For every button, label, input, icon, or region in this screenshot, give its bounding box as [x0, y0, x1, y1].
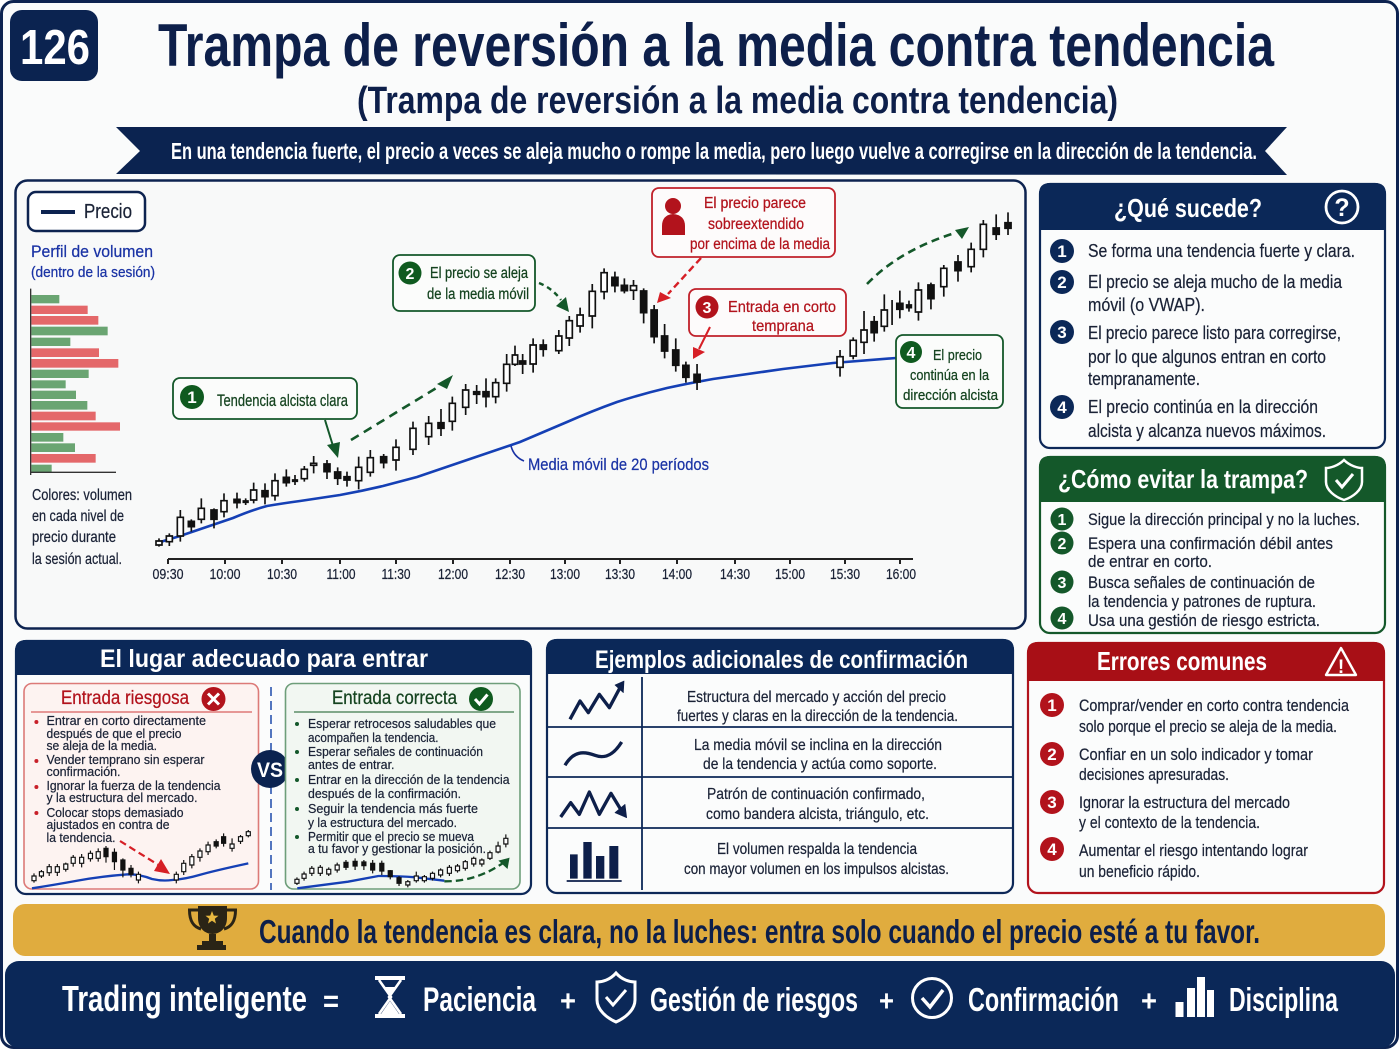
- row 2: La media móvil se inclina en la dirección: [694, 737, 942, 754]
- item 2: decisiones apresuradas.: [1079, 765, 1229, 784]
- subtitle: (Trampa de reversión a la media contra tendencia): [357, 80, 1118, 122]
- icon: shield check: [1326, 460, 1362, 500]
- item 4: [1040, 837, 1308, 881]
- badge: vs: [251, 750, 289, 788]
- row 4: El volumen respalda la tendencia: [717, 841, 917, 858]
- heading: volume profile: (dentro de la sesión): [31, 265, 155, 281]
- callout 3: early short: [689, 289, 846, 336]
- icon: question mark: ?: [1334, 194, 1350, 222]
- time axis: 16:00: [886, 567, 916, 583]
- item 2: 2: [1058, 536, 1067, 553]
- item 4: Aumentar el riesgo intentando lograr: [1079, 841, 1308, 860]
- list: correct entry: a tu favor y gestionar la posición.: [308, 841, 486, 856]
- arrow: risky entry: [120, 841, 170, 874]
- list: risky entry: Ignorar la fuerza de la tendencia: [46, 778, 221, 793]
- list: correct entry: Permitir que el precio se mueva: [308, 829, 475, 844]
- callout: overextended: El precio parece: [704, 195, 806, 212]
- time axis: 15:00: [775, 567, 805, 583]
- footer: smart trading formula: Disciplina: [1229, 981, 1338, 1018]
- list: correct entry: Esperar señales de continuación: [308, 744, 483, 759]
- heading: errores comunes: Errores comunes: [1097, 646, 1267, 676]
- icon: shield: [597, 973, 635, 1022]
- panel: additional confirmation examples: [546, 639, 1014, 893]
- footer: smart trading formula: Trading inteligente: [62, 978, 307, 1019]
- callout 4: continuation: continúa en la: [910, 367, 990, 384]
- item 4: 4: [1047, 840, 1057, 859]
- heading: lugar adecuado: El lugar adecuado para entrar: [100, 645, 428, 673]
- item 4: [1050, 606, 1320, 630]
- arrow: overextended to peak: [657, 258, 701, 303]
- sub-panel: risky entry: [24, 684, 258, 889]
- item 4: alcista y alcanza nuevos máximos.: [1088, 420, 1326, 441]
- list: correct entry: antes de entrar.: [308, 757, 394, 772]
- icon: bars: [1176, 977, 1214, 1017]
- arrow: callout 3 to entry: [693, 327, 710, 359]
- item 2: El precio se aleja mucho de la media: [1088, 271, 1343, 292]
- item 2: de entrar en corto.: [1088, 552, 1212, 571]
- list: risky entry: la tendencia.: [46, 830, 116, 845]
- callout 2: price moves away: de la media móvil: [427, 286, 529, 303]
- footer: smart trading formula: =: [323, 985, 339, 1018]
- footer: smart trading formula: Confirmación: [968, 981, 1119, 1018]
- text: color note: la sesión actual.: [32, 551, 122, 568]
- item 3: El precio parece listo para corregirse,: [1088, 322, 1341, 343]
- time axis: 15:30: [830, 567, 860, 583]
- item 1: 1: [1058, 512, 1067, 529]
- item 3: tempranamente.: [1088, 368, 1200, 389]
- item 3: [1050, 570, 1316, 611]
- list: risky entry: Colocar stops demasiado: [46, 805, 184, 820]
- footer: smart trading formula: +: [1141, 985, 1157, 1018]
- list: risky entry: Entrar en corto directamente: [46, 713, 206, 728]
- time axis: [152, 559, 916, 583]
- row 1: Estructura del mercado y acción del precio: [687, 689, 946, 706]
- row 4: [684, 841, 949, 878]
- callout 3: early short: temprana: [752, 318, 814, 335]
- chart: volume profile bars: [31, 289, 120, 475]
- list: risky entry: y la estructura del mercado.: [46, 790, 198, 805]
- list: risky entry: [34, 713, 221, 845]
- list: risky entry: después de que el precio: [46, 726, 182, 741]
- heading: volume profile: Perfil de volumen: [31, 242, 153, 261]
- panel: how to avoid: [1039, 456, 1386, 633]
- legend: precio: Precio: [84, 201, 132, 223]
- item 3: [1040, 790, 1290, 832]
- item 3: y el contexto de la tendencia.: [1079, 813, 1260, 832]
- item 1: 1: [1057, 242, 1067, 261]
- time axis: 11:00: [326, 567, 356, 583]
- sub-panel: correct entry: [286, 684, 520, 889]
- text: color note: [32, 487, 132, 568]
- list: correct entry: Seguir la tendencia más fuerte: [308, 801, 478, 816]
- time axis: 12:00: [438, 567, 468, 583]
- text: color note: precio durante: [32, 529, 116, 546]
- heading: que sucede: ¿Qué sucede?: [1114, 193, 1262, 223]
- callout: overextended: sobreextendido: [708, 216, 804, 233]
- time axis: 14:00: [662, 567, 692, 583]
- list: risky entry: ajustados en contra de: [46, 817, 170, 832]
- list: correct entry: y la estructura del mercado.: [308, 815, 457, 830]
- item 2: 2: [1057, 273, 1067, 292]
- list: risky entry: Vender temprano sin esperar: [46, 752, 205, 767]
- banner: gold takeaway: [13, 904, 1385, 956]
- badge: vs: VS: [257, 759, 283, 782]
- item 3: 3: [1058, 575, 1067, 592]
- arrow: dashed continuation: [867, 227, 969, 284]
- icon: check: [469, 687, 493, 711]
- panel: common errors: [1027, 642, 1385, 893]
- item 1: [1050, 508, 1360, 530]
- heading: ejemplos: Ejemplos adicionales de confirmación: [595, 646, 968, 674]
- item 2: 2: [1047, 745, 1057, 764]
- arrow: callout 1 to candles: [325, 420, 340, 458]
- banner: summary ribbon: [116, 127, 1287, 175]
- item 1: Sigue la dirección principal y no la luches.: [1088, 510, 1360, 529]
- callout 3: early short: Entrada en corto: [728, 299, 836, 316]
- item 3: 3: [1047, 793, 1057, 812]
- candlesticks: morning: [156, 346, 518, 547]
- panel: right place to enter: [15, 640, 532, 894]
- row 4: con mayor volumen en los impulsos alcistas.: [684, 861, 949, 878]
- time axis: 11:30: [382, 567, 410, 583]
- time axis: 12:30: [495, 567, 525, 583]
- time axis: 13:30: [605, 567, 635, 583]
- callout 1: clear uptrend: 1: [187, 388, 197, 407]
- list: correct entry: Esperar retrocesos saludables que: [308, 716, 496, 731]
- moving average line: [157, 358, 896, 543]
- time axis: 10:00: [210, 567, 240, 583]
- footer: smart trading formula: Paciencia: [423, 981, 537, 1019]
- sub-panel: correct entry: Entrada correcta: [332, 688, 457, 709]
- callout 3: early short: 3: [703, 300, 712, 317]
- footer: smart trading formula: +: [560, 985, 576, 1018]
- row 1: fuertes y claras en la dirección de la tendencia.: [677, 708, 958, 725]
- callout 1: clear uptrend: Tendencia alcista clara: [217, 391, 348, 410]
- candlesticks: afternoon: [520, 212, 1011, 390]
- heading: como evitar: ¿Cómo evitar la trampa?: [1058, 464, 1308, 494]
- callout 2: price moves away: 2: [406, 266, 415, 283]
- icon: x: [202, 687, 226, 711]
- row 2: [694, 737, 942, 773]
- callout: overextended: [652, 188, 835, 257]
- item 3: la tendencia y patrones de ruptura.: [1088, 592, 1316, 611]
- callout 4: continuation: [896, 335, 1003, 408]
- icon: warning: !: [1338, 657, 1344, 678]
- item 2: [1040, 742, 1313, 784]
- item 3: Ignorar la estructura del mercado: [1079, 793, 1290, 812]
- item 4: [1050, 395, 1326, 441]
- item 1: Comprar/vender en corto contra tendencia: [1079, 696, 1349, 715]
- row 2: de la tendencia y actúa como soporte.: [703, 756, 937, 773]
- row 3: Patrón de continuación confirmado,: [707, 786, 925, 803]
- icon: person: [662, 198, 685, 235]
- panel: what happens: [1039, 183, 1386, 448]
- badge: number 126: 126: [20, 21, 90, 75]
- footer: smart trading formula: [5, 961, 1395, 1048]
- item 2: Espera una confirmación débil antes: [1088, 534, 1333, 553]
- text: color note: en cada nivel de: [32, 508, 124, 525]
- item 1: [1050, 239, 1355, 263]
- item 4: 4: [1057, 398, 1067, 417]
- callout 4: continuation: 4: [907, 345, 916, 362]
- icon: trophy: [190, 906, 236, 950]
- item 4: Usa una gestión de riesgo estricta.: [1088, 611, 1320, 630]
- callout 2: price moves away: El precio se aleja: [430, 265, 528, 282]
- row 3: [706, 786, 929, 823]
- item 2: [1050, 532, 1333, 571]
- item 1: Se forma una tendencia fuerte y clara.: [1088, 240, 1355, 261]
- time axis: 10:30: [267, 567, 297, 583]
- item 2: Confiar en un solo indicador y tomar: [1079, 745, 1313, 764]
- time axis: 09:30: [152, 567, 184, 583]
- item 4: un beneficio rápido.: [1079, 862, 1200, 881]
- heading: volume profile: [31, 242, 155, 281]
- row 3: como bandera alcista, triángulo, etc.: [706, 806, 929, 823]
- footer: smart trading formula: +: [879, 985, 894, 1018]
- mini chart: correct entry: [295, 834, 510, 888]
- label: moving average: [511, 446, 709, 474]
- time axis: 14:30: [720, 567, 750, 583]
- arrow: callout 2 to peak: [539, 283, 569, 312]
- row 1: [677, 689, 958, 725]
- icon: check circle: [912, 978, 952, 1018]
- item 1: 1: [1047, 696, 1057, 715]
- item 3: [1050, 320, 1341, 389]
- divider: vs: [270, 687, 272, 890]
- legend: precio: [28, 192, 145, 231]
- time axis: 13:00: [550, 567, 580, 583]
- label: moving average: Media móvil de 20 períodos: [528, 455, 709, 474]
- callout 1: clear uptrend: [173, 378, 357, 419]
- list: correct entry: acompañen la tendencia.: [308, 730, 438, 745]
- text: color note: Colores: volumen: [32, 487, 132, 504]
- callout 4: continuation: dirección alcista: [903, 387, 999, 404]
- callout 2: price moves away: [393, 255, 535, 311]
- footer: smart trading formula: Gestión de riesgos: [650, 981, 858, 1018]
- item 4: El precio continúa en la dirección: [1088, 396, 1318, 417]
- list: correct entry: después de la confirmación.: [308, 786, 461, 801]
- item 2: móvil (o VWAP).: [1088, 294, 1205, 315]
- callout 4: continuation: El precio: [933, 347, 982, 364]
- panel: price chart: [16, 180, 1026, 628]
- callout: overextended: por encima de la media: [690, 236, 830, 253]
- item 3: Busca señales de continuación de: [1088, 573, 1315, 592]
- mini chart: risky entry: [32, 830, 250, 888]
- icon: hourglass: [375, 976, 405, 1018]
- list: risky entry: confirmación.: [46, 764, 120, 779]
- item 2: [1050, 270, 1343, 315]
- arrow: dashed trend up: [351, 375, 453, 440]
- list: risky entry: se aleja de la media.: [46, 738, 157, 753]
- item 1: [1040, 693, 1349, 736]
- icon: question mark: [1326, 191, 1358, 223]
- list: correct entry: [295, 716, 510, 856]
- list: correct entry: Entrar en la dirección de la tendencia: [308, 772, 510, 787]
- item 3: por lo que algunos entran en corto: [1088, 346, 1326, 367]
- item 3: 3: [1057, 323, 1067, 342]
- badge: number 126: [10, 10, 98, 81]
- icons: confirmation examples: [561, 681, 627, 881]
- icon: warning: [1326, 648, 1356, 678]
- item 4: 4: [1058, 611, 1067, 628]
- sub-panel: risky entry: Entrada riesgosa: [61, 688, 189, 709]
- item 1: solo porque el precio se aleja de la media.: [1079, 717, 1337, 736]
